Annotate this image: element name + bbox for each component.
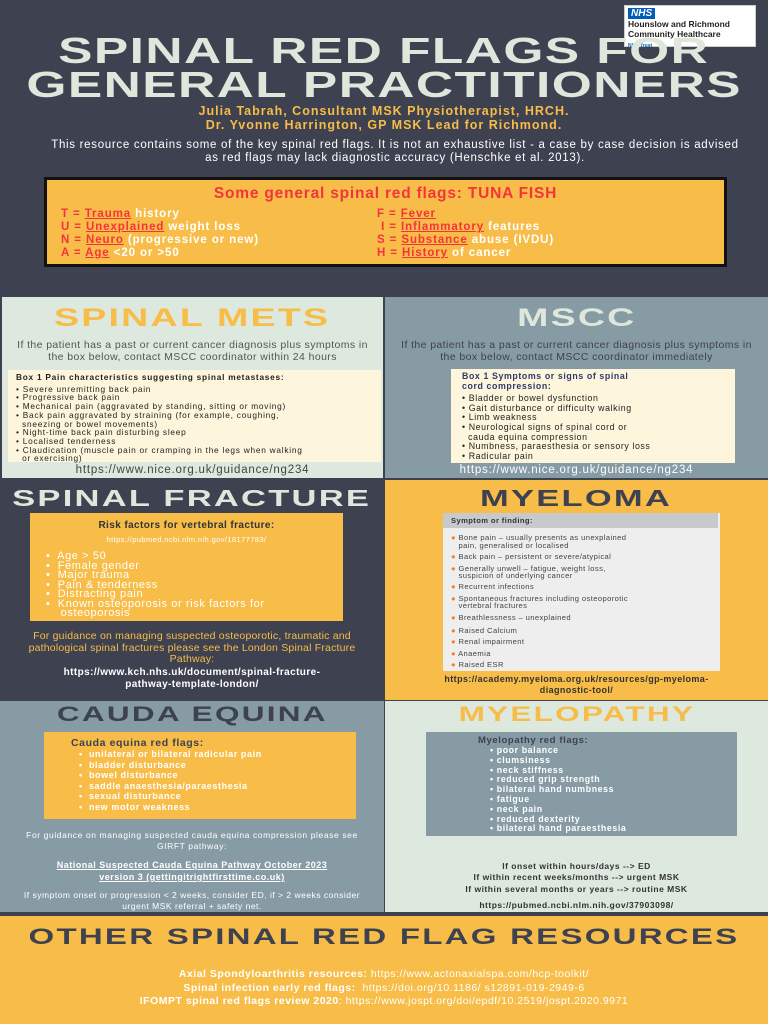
link — [56, 860, 328, 882]
risk box: https://pubmed.ncbi.nlm.nih.gov/18177783/ — [107, 535, 266, 544]
title — [26, 30, 742, 105]
panel: TUNA FISH: F = Fever — [377, 208, 436, 220]
red flags box: • bowel disturbance — [79, 770, 178, 780]
box 1: • Localised tenderness — [16, 436, 116, 446]
url — [444, 674, 709, 695]
risk box: Risk factors for vertebral fracture: — [98, 520, 275, 531]
TUNA heading: Some general spinal red flags: TUNA FISH — [214, 185, 557, 202]
box 1: • Gait disturbance or difficulty walking — [462, 403, 632, 413]
guidance: For guidance on managing suspected cauda equina compression please see GIRFT pathway: — [26, 830, 358, 851]
symptom table: ● Recurrent infections — [451, 582, 534, 591]
red flags box: • neck stiffness — [490, 765, 564, 775]
red flags box: • bilateral hand paraesthesia — [490, 823, 626, 833]
onset guidance: If onset within hours/days --> ED — [502, 861, 651, 871]
box 1: • Back pain aggravated by straining (for example, coughing, — [16, 410, 279, 420]
box 1 — [8, 370, 381, 462]
heading: OTHER SPINAL RED FLAG RESOURCES — [29, 924, 739, 949]
title: SPINAL RED FLAGS FOR — [58, 30, 710, 71]
symptom table: ● Back pain – persistent or severe/atypical — [451, 552, 611, 561]
red flags box: • new motor weakness — [79, 802, 190, 812]
resource links: Spinal infection early red flags: https://doi.org/10.1186/ s12891-019-2949-6 — [183, 982, 585, 994]
url: https://pubmed.ncbi.nlm.nih.gov/37903098/ — [479, 900, 674, 910]
text: If the patient has a past or current cancer diagnosis plus symptoms in the box below, contact MSCC coordinator within 24 hours — [17, 339, 368, 362]
risk box: • Known osteoporosis or risk factors for — [46, 598, 265, 610]
heading: CAUDA EQUINA — [57, 703, 327, 726]
symptom table: suspicion of underlying cancer — [459, 571, 573, 580]
authors: Julia Tabrah, Consultant MSK Physiotherapist, HRCH. — [199, 104, 569, 118]
box 1: • Mechanical pain (aggravated by standing, sitting or moving) — [16, 401, 286, 411]
url — [64, 667, 320, 690]
url: https://www.nice.org.uk/guidance/ng234 — [460, 464, 693, 476]
authors: Dr. Yvonne Harrington, GP MSK Lead for Richmond. — [206, 118, 562, 132]
box 1: • Radicular pain — [462, 451, 533, 461]
panel: spinal mets — [2, 297, 383, 478]
symptom table — [443, 513, 720, 671]
red flags box: • reduced dexterity — [490, 814, 580, 824]
box 1: • Progressive back pain — [16, 392, 120, 402]
symptom table: pain, generalised or localised — [459, 541, 569, 550]
heading: SPINAL METS — [54, 304, 331, 332]
onset guidance: If within several months or years --> routine MSK — [465, 884, 688, 894]
resource links: Axial Spondyloarthritis resources: https://www.actonaxialspa.com/hcp-toolkit/ — [179, 968, 589, 980]
heading: MYELOPATHY — [458, 703, 695, 726]
panel: TUNA FISH: I = Inflammatory features — [381, 221, 540, 233]
box 1: • Numbness, paraesthesia or sensory loss — [462, 441, 650, 451]
red flags box: • bladder disturbance — [79, 760, 186, 770]
panel: myelopathy — [385, 701, 768, 912]
url: https://www.kch.nhs.uk/document/spinal-fracture- — [64, 667, 320, 678]
box 1: • Bladder or bowel dysfunction — [462, 393, 598, 403]
risk box: • Female gender — [46, 560, 140, 572]
logo: NHS: NHS Trust — [628, 43, 652, 49]
TUNA list — [61, 208, 259, 259]
TUNA list: N = Neuro (progressive or new) — [61, 234, 259, 246]
red flags box — [44, 732, 356, 819]
risk box: osteoporosis — [61, 607, 130, 619]
TUNA list: U = Unexplained weight loss — [61, 221, 241, 233]
onset guidance: If within recent weeks/months --> urgent MSK — [474, 872, 679, 882]
logo: NHS — [624, 5, 756, 47]
red flags box: • fatigue — [490, 794, 530, 804]
TUNA list: T = Trauma history — [61, 208, 180, 220]
panel: TUNA FISH — [44, 177, 727, 267]
symptom table: ● Spontaneous fractures including osteoporotic — [451, 594, 628, 603]
box 1: cord compression: — [462, 381, 551, 391]
url: diagnostic-tool/ — [540, 685, 613, 695]
logo: NHS: NHS — [631, 8, 652, 19]
panel: myeloma — [385, 480, 768, 700]
resource links: IFOMPT spinal red flags review 2020: https://www.jospt.org/doi/epdf/10.2519/jospt.2020.9971 — [140, 995, 628, 1007]
risk box — [30, 513, 343, 621]
box 1 — [451, 369, 735, 463]
red flags box: Cauda equina red flags: — [71, 737, 204, 749]
red flags box: Myelopathy red flags: — [478, 735, 588, 746]
onset guidance — [465, 861, 688, 894]
box 1: or exercising) — [22, 453, 82, 463]
panel: MSCC — [385, 297, 768, 478]
link: National Suspected Cauda Equina Pathway October 2023 — [57, 860, 327, 870]
risk box: • Major trauma — [46, 569, 130, 581]
logo: NHS: Hounslow and Richmond — [628, 19, 730, 29]
box 1: • Night-time back pain disturbing sleep — [16, 427, 187, 437]
box 1: Box 1 Pain characteristics suggesting spinal metastases: — [16, 372, 284, 382]
red flags box: • bilateral hand numbness — [490, 784, 614, 794]
symptom table: Symptom or finding: — [451, 516, 533, 525]
red flags box: • reduced grip strength — [490, 774, 600, 784]
heading: MYELOMA — [480, 485, 673, 511]
red flags box: • poor balance — [490, 745, 559, 755]
risk box: • Age > 50 — [46, 550, 106, 562]
heading: SPINAL FRACTURE — [13, 485, 371, 511]
note: If symptom onset or progression < 2 weeks, consider ED, if > 2 weeks consider urgent MSK referral + safety net. — [24, 890, 360, 911]
symptom table: ● Breathlessness – unexplained — [451, 613, 571, 622]
red flags box: • clumsiness — [490, 755, 551, 765]
box 1: • Limb weakness — [462, 412, 537, 422]
url: https://academy.myeloma.org.uk/resources/gp-myeloma- — [444, 674, 709, 684]
box 1: • Claudication (muscle pain or cramping in the legs when walking — [16, 445, 303, 455]
panel: TUNA FISH: S = Substance abuse (IVDU) — [377, 234, 554, 246]
red flags box: • unilateral or bilateral radicular pain — [79, 749, 262, 759]
box 1: cauda equina compression — [468, 432, 588, 442]
symptom table: vertebral fractures — [459, 601, 527, 610]
resource links — [140, 968, 628, 1007]
symptom table: ● Generally unwell – fatigue, weight loss, — [451, 564, 606, 573]
box 1: Box 1 Symptoms or signs of spinal — [462, 371, 628, 381]
box 1: sneezing or bowel movements) — [22, 419, 158, 429]
red flags box: • saddle anaesthesia/paraesthesia — [79, 780, 248, 790]
symptom table: ● Anaemia — [451, 649, 491, 658]
link: version 3 (gettingitrightfirsttime.co.uk) — [99, 872, 285, 882]
box 1: • Severe unremitting back pain — [16, 384, 151, 394]
red flags box: • sexual disturbance — [79, 791, 181, 801]
symptom table: ● Bone pain – usually presents as unexplained — [451, 533, 626, 542]
title: GENERAL PRACTITIONERS — [26, 64, 742, 105]
panel: TUNA FISH: H = History of cancer — [377, 247, 511, 259]
panel: other resources — [0, 916, 768, 1024]
box 1: • Neurological signs of spinal cord or — [462, 422, 627, 432]
TUNA list: A = Age <20 or >50 — [61, 247, 180, 259]
guidance: For guidance on managing suspected osteoporotic, traumatic and pathological spinal fractures please see the London Spinal Fracture Pathway: — [29, 630, 355, 665]
symptom table: ● Raised ESR — [451, 660, 504, 669]
symptom table: ● Renal impairment — [451, 637, 524, 646]
logo: NHS: Community Healthcare — [628, 29, 721, 39]
symptom table: ● Raised Calcium — [451, 626, 517, 635]
risk box: • Distracting pain — [46, 588, 143, 600]
text: If the patient has a past or current cancer diagnosis plus symptoms in the box below, contact MSCC coordinator immediately — [401, 339, 752, 362]
risk box: • Pain & tenderness — [46, 578, 158, 590]
heading: MSCC — [517, 304, 636, 332]
authors — [198, 104, 569, 132]
intro text: This resource contains some of the key spinal red flags. It is not an exhaustive list - a case by case decision is advised as red flags may lack diagnostic accuracy (Henschke et al. 2013). — [51, 139, 739, 164]
red flags box — [426, 732, 737, 836]
url: pathway-template-london/ — [125, 678, 259, 690]
red flags box: • neck pain — [490, 804, 543, 814]
panel: spinal fracture — [0, 480, 384, 700]
url: https://www.nice.org.uk/guidance/ng234 — [76, 464, 309, 476]
panel: cauda equina — [0, 701, 384, 912]
